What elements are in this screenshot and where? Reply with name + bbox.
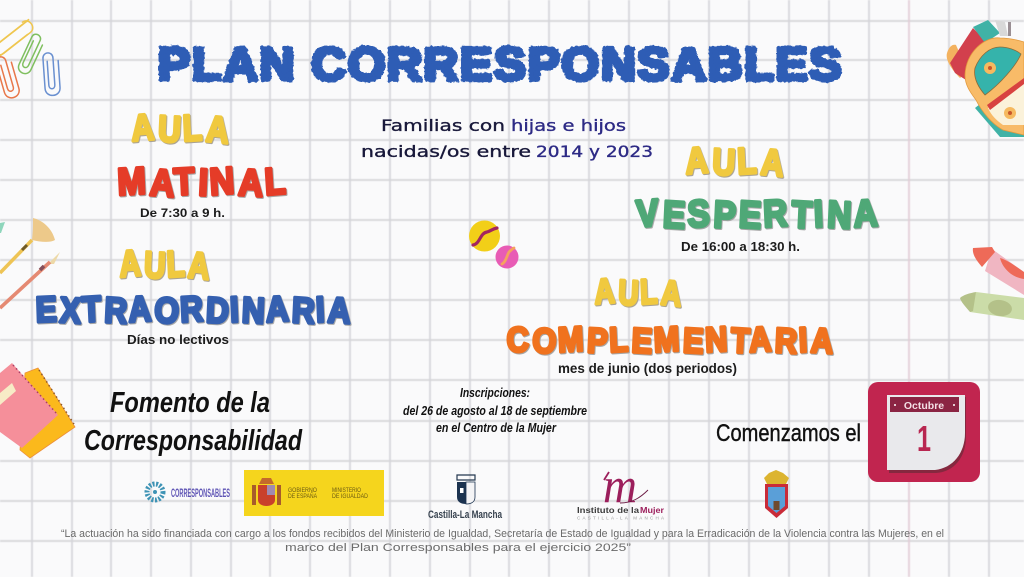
heading: aula: AULA: [593, 270, 683, 314]
panel: aula complementaria: [506, 270, 834, 376]
footnote: funding statement: marco del Plan Corresponsables para el ejercicio 2025”: [285, 542, 631, 554]
logo: instituto de la mujer: Mujer: [640, 505, 665, 515]
panel: aula vespertina: [635, 140, 878, 254]
title: PLAN CORRESPONSABLES: [158, 38, 842, 90]
icon: notebooks: [0, 363, 75, 458]
heading: matinal: MATINAL: [116, 158, 287, 205]
text block: target families: Familias con: [381, 116, 505, 135]
text: CORRESPONSABLES: [171, 488, 230, 500]
dates text: Días no lectivos: [127, 332, 229, 347]
text block: target families: 2014 y 2023: [536, 142, 653, 161]
heading: extraordinaria: EXTRAORDINARIA: [35, 289, 352, 332]
schedule text: De 16:00 a 18:30 h.: [681, 240, 800, 254]
text block: target families: hijas e hijos: [511, 116, 626, 135]
heading: aula: AULA: [684, 140, 785, 185]
text block: inscripciones: del 26 de agosto al 18 de septiembre: [403, 403, 587, 418]
logo: instituto de la mujer: Instituto de la: [577, 505, 639, 515]
logo: municipal crest: [764, 470, 789, 518]
icon: calendar 1 octubre: 1: [917, 418, 931, 459]
logo: gobierno de españa: DE ESPAÑA: [288, 493, 317, 500]
icon: calendar 1 octubre: [868, 382, 980, 482]
heading: aula: AULA: [130, 107, 230, 152]
text block: fomento de la corresponsabilidad: Fomento de la: [110, 387, 270, 419]
marbles logo: [469, 220, 518, 268]
logo: gobierno de españa: DE IGUALDAD: [332, 494, 369, 500]
icon: calendar 1 octubre: Octubre: [904, 400, 944, 412]
icon: paper clips: [0, 18, 61, 100]
logo: instituto de la mujer: CASTILLA-LA MANCHA: [577, 516, 664, 520]
heading: vespertina: VESPERTINA: [635, 191, 878, 237]
panel: aula matinal: [116, 107, 287, 220]
heading: aula: AULA: [118, 243, 211, 288]
text block: target families: nacidas/os entre: [361, 142, 531, 161]
text block: fomento de la corresponsabilidad: [84, 387, 303, 457]
text block: inscripciones: Inscripciones:: [460, 385, 530, 400]
heading: complementaria: COMPLEMENTARIA: [506, 319, 834, 361]
dates text: mes de junio (dos periodos): [558, 360, 737, 376]
logo: castilla-la mancha: Castilla-La Mancha: [428, 509, 503, 521]
text block: fomento de la corresponsabilidad: Corresponsabilidad: [84, 425, 303, 457]
logo: gobierno de españa: GOBIERNO: [288, 488, 317, 494]
logo: instituto de la mujer: [577, 457, 665, 520]
text block: inscripciones: en el Centro de la Mujer: [436, 420, 557, 435]
footnote: funding statement: “La actuación ha sido financiada con cargo a los fondos recibidos del Ministerio de Igualdad, Secretaría de Estado de Igualdad y para la Erradicación de la Violencia contra las Mujeres, en el: [61, 528, 944, 540]
logo: instituto de la mujer: m: [603, 457, 637, 513]
logo: gobierno de españa: MINISTERIO: [332, 488, 361, 494]
text block: target families: [361, 116, 653, 161]
logo: gobierno de españa: [244, 470, 384, 516]
icon: backpack: [947, 20, 1024, 137]
schedule text: De 7:30 a 9 h.: [140, 206, 225, 220]
icon: crayons: [960, 247, 1024, 320]
logo: castilla-la mancha: [428, 475, 503, 521]
logo: corresponsables: [147, 484, 230, 500]
text: comenzamos el: Comenzamos el: [716, 420, 861, 447]
icon: paint brushes: [0, 218, 60, 308]
footnote: funding statement: [61, 528, 944, 554]
panel: aula extraordinaria: [35, 243, 352, 347]
text block: inscripciones: [403, 385, 587, 435]
